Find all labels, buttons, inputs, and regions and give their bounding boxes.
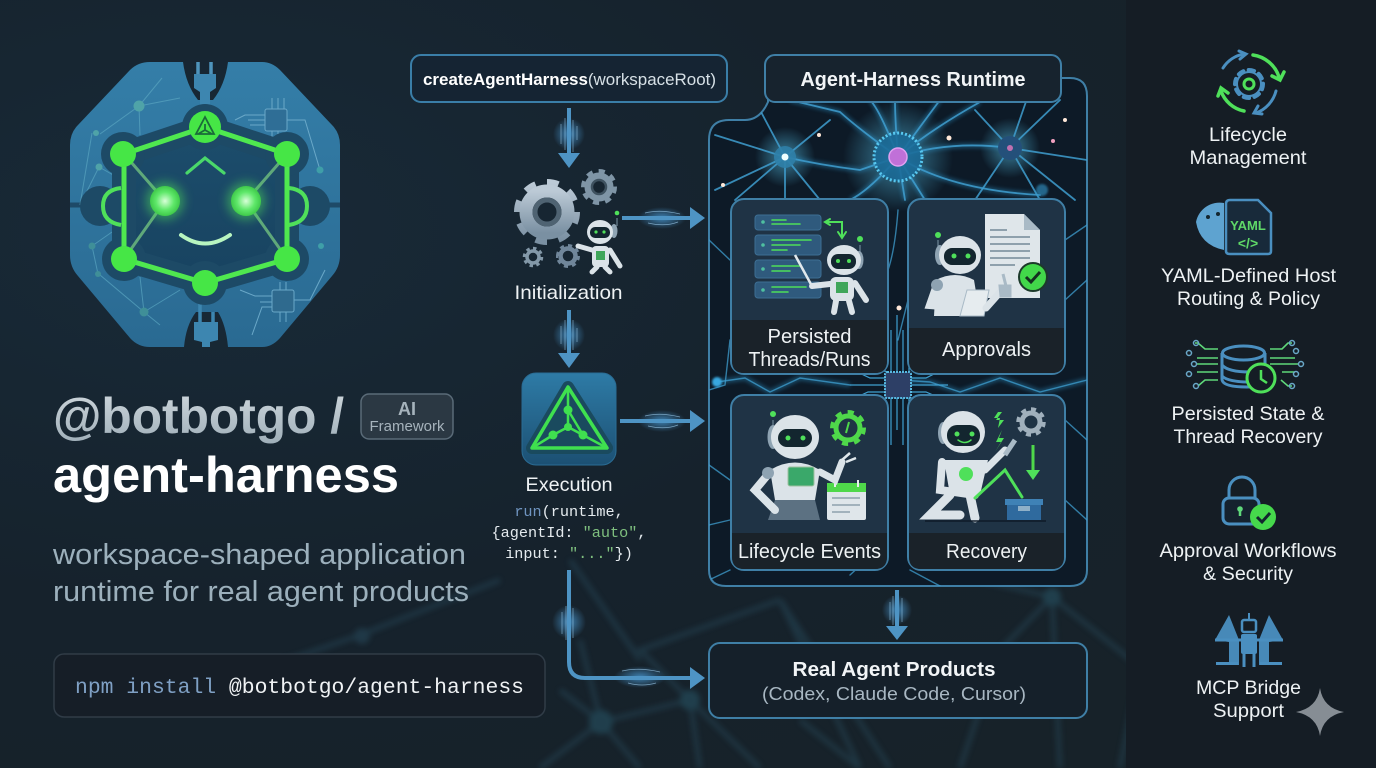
feature: approval workflows [1160,477,1337,585]
logo ears [103,188,307,225]
icon: yaml document with robot [1196,200,1271,254]
glow layer [717,100,1087,392]
arrow: create to initialization [553,108,585,168]
icon: gears and robot [518,172,620,272]
text: MCP Bridge [1196,677,1301,699]
panel: agent-harness runtime [709,55,1087,586]
arrow: initialization to runtime [622,207,705,229]
panel: real agent products: Real Agent Products [792,659,996,681]
install command box [54,654,545,717]
presenter robot [812,236,866,312]
down arrow [1026,445,1040,480]
card: persisted threads/runs [731,199,888,374]
feature: persisted state [1172,340,1324,448]
calendar [827,480,866,520]
title: @botbotgo / [53,388,344,444]
panel title tab: Agent-Harness Runtime [800,69,1026,91]
card: recovery [908,395,1065,570]
code: run call [492,503,646,563]
arrow: initialization to execution [553,310,585,368]
sparkle mark [1296,688,1344,736]
toolbox [1005,499,1043,520]
panel body [709,78,1087,586]
icon: execution tile [522,373,616,465]
subtitle: runtime for real agent products [53,576,469,608]
card label: Persisted [768,326,852,348]
icon: yaml document with robot: YAML [1230,218,1266,233]
thread rows list [755,215,821,298]
text [1160,540,1337,585]
arrow: execution to runtime [620,410,705,432]
label: execution: Execution [526,474,612,496]
logo plug top [194,62,216,112]
code: run call: input: "..."}) [505,545,633,563]
text: Persisted State & [1172,403,1324,425]
badge: AI Framework: Framework [369,418,445,435]
text: Thread Recovery [1174,426,1323,448]
subtitle [52,539,469,608]
background neural network pattern [230,560,1149,768]
text: Approval Workflows [1160,540,1337,562]
reading robot [930,232,1010,316]
icon: database with clock [1186,340,1304,392]
triangle symbol [532,387,607,448]
logo nodes [110,111,300,296]
panel: project branding [52,62,545,717]
icon: yaml document with robot: </> [1238,235,1258,251]
card: approvals [908,199,1065,374]
create harness call box: createAgentHarness(workspaceRoot) [423,70,716,89]
logo spokes [124,154,287,259]
icon: lifecycle cycle [1218,51,1284,114]
sidebar: features [1160,51,1337,722]
gray gear [1018,410,1044,434]
feature: yaml routing [1161,200,1337,310]
logo circuit lines [70,78,340,335]
document [985,214,1040,298]
logo face plate [80,104,330,305]
text [1161,265,1337,310]
arrow: runtime to products [882,590,912,640]
card: lifecycle events [731,395,888,570]
text: YAML-Defined Host [1161,265,1337,287]
card label: Recovery [946,541,1027,563]
title [53,388,399,503]
text: & Security [1203,563,1293,585]
text: Support [1213,700,1285,722]
panel title tab [765,55,1061,102]
feature: mcp bridge [1196,613,1301,722]
code: run call: {agentId: "auto", [492,524,646,542]
logo brow and smile [181,158,230,244]
repair robot [925,411,1046,521]
cycle arrow [825,219,846,238]
logo eyes [146,182,265,220]
neural network artwork [709,90,1087,586]
text: Management [1190,147,1307,169]
card label [748,326,870,371]
text [1190,124,1307,169]
card label: Approvals [942,339,1031,361]
lightning bolt [994,412,1004,452]
text: Lifecycle [1209,124,1287,146]
icon: lock with check [1223,477,1276,530]
central chip [850,315,948,445]
label: initialization: Initialization [514,282,622,304]
panel: real agent products [709,643,1087,718]
logo: robot harness face [70,62,340,347]
code: run call: run(runtime, [514,503,624,521]
badge: AI Framework: AI [398,399,416,419]
small robot [578,211,620,272]
text [1172,403,1324,448]
card label: Lifecycle Events [738,541,881,563]
badge: AI Framework [361,394,453,439]
arrow: execution to products [552,570,705,689]
green gear [832,412,864,444]
text: Routing & Policy [1177,288,1320,310]
icon: robot bridge [1215,613,1283,667]
card label: Threads/Runs [748,349,870,371]
small gears [524,246,578,266]
logo hexagon frame [124,127,287,283]
install command box: npm install @botbotgo/agent-harness [75,676,524,700]
big gear [518,183,576,241]
logo top node symbol [196,117,214,134]
feature: lifecycle management [1190,51,1307,169]
logo plug bottom [194,300,218,347]
right sidebar panel [1126,0,1376,768]
subtitle: workspace-shaped application [52,539,466,571]
create harness call box [411,55,727,102]
green check badge [1019,263,1047,291]
robot with event [755,411,856,520]
pointer [795,255,813,288]
title: agent-harness [53,447,399,503]
text [1196,677,1301,722]
panel: real agent products: (Codex, Claude Code, Cursor) [762,684,1026,704]
upper gear [584,172,614,202]
